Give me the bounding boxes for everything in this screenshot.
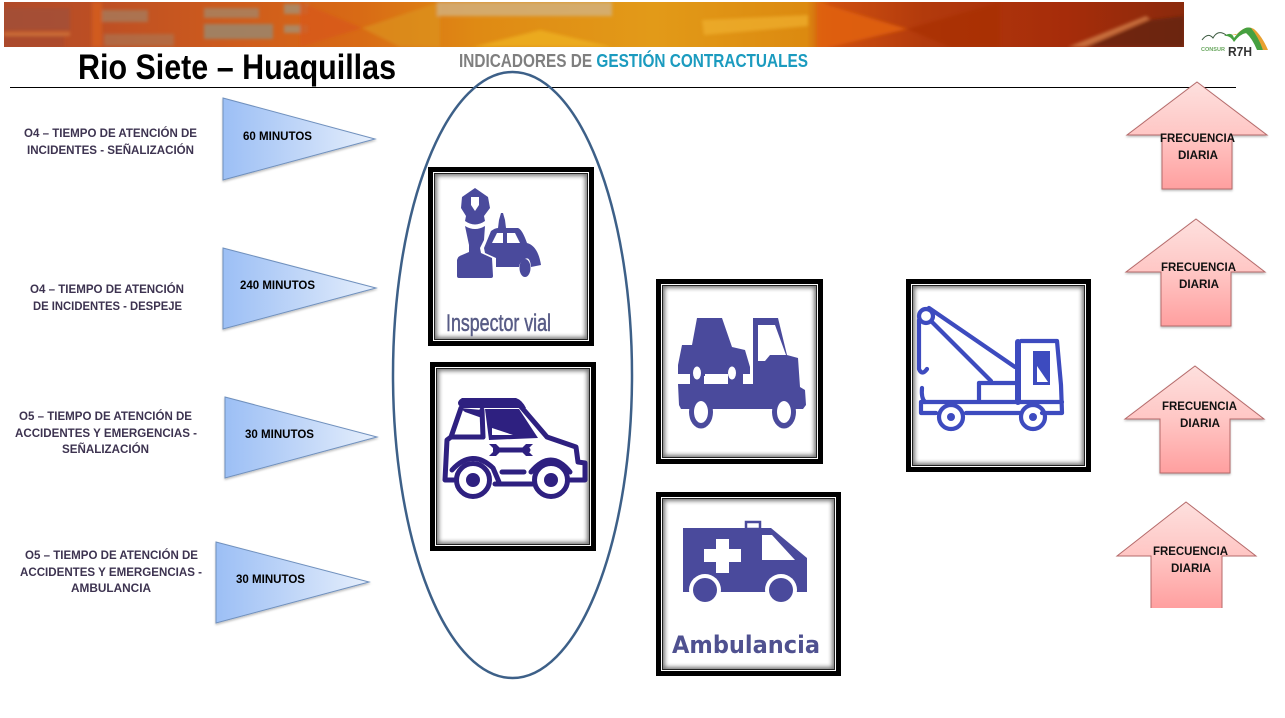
text: ambulancia: Ambulancia bbox=[672, 631, 820, 659]
label: O4 despeje: DE INCIDENTES - DESPEJE bbox=[33, 299, 182, 313]
arrow: frecuencia diaria 3 bbox=[1125, 366, 1264, 473]
label: O5 señalización: O5 – TIEMPO DE ATENCIÓN DE bbox=[19, 408, 192, 423]
arrow: frecuencia diaria 1: DIARIA bbox=[1178, 148, 1218, 162]
label: O5 señalización: SEÑALIZACIÓN bbox=[62, 441, 149, 456]
triangle: 240 minutos: 240 MINUTOS bbox=[240, 278, 315, 292]
triangle: 30 minutos bbox=[216, 542, 369, 623]
header banner bbox=[4, 2, 1268, 88]
arrow: frecuencia diaria 4: FRECUENCIA bbox=[1153, 544, 1228, 558]
indicator row 4 bbox=[20, 542, 369, 623]
icon card: taller car bbox=[430, 362, 596, 551]
label: O4 señalización: O4 – TIEMPO DE ATENCIÓN DE bbox=[24, 125, 197, 140]
triangle: 30 minutos: 30 MINUTOS bbox=[245, 427, 314, 441]
triangle: 60 minutos: 60 MINUTOS bbox=[243, 129, 312, 143]
arrow: frecuencia diaria 3: DIARIA bbox=[1180, 416, 1220, 430]
triangle: 240 minutos bbox=[223, 248, 376, 329]
triangle: 30 minutos bbox=[225, 397, 377, 478]
label: O5 ambulancia: AMBULANCIA bbox=[71, 581, 151, 595]
oval grouping patrol vehicles bbox=[393, 72, 632, 678]
arrow: frecuencia diaria 2: DIARIA bbox=[1179, 277, 1219, 291]
arrow: frecuencia diaria 1 bbox=[1127, 82, 1267, 189]
logo: Consur R7H bbox=[1201, 27, 1268, 59]
logo: Consur R7H: CONSUR bbox=[1201, 47, 1225, 53]
title: Rio Siete – Huaquillas bbox=[78, 48, 396, 87]
icon card: flatbed tow truck bbox=[656, 279, 823, 464]
label: O5 ambulancia: O5 – TIEMPO DE ATENCIÓN DE bbox=[25, 547, 198, 562]
indicator row 1 bbox=[24, 98, 375, 180]
icon card: inspector vial bbox=[428, 167, 594, 346]
text: inspector vial: Inspector vial bbox=[446, 310, 551, 337]
logo: Consur R7H: R7H bbox=[1228, 44, 1252, 59]
label: O4 señalización: INCIDENTES - SEÑALIZACIÓN bbox=[27, 142, 194, 157]
arrow: frecuencia diaria 1: FRECUENCIA bbox=[1160, 131, 1235, 145]
label: O5 ambulancia: ACCIDENTES Y EMERGENCIAS - bbox=[20, 565, 202, 579]
icon card: ambulancia bbox=[656, 492, 841, 676]
arrow: frecuencia diaria 2: FRECUENCIA bbox=[1161, 260, 1236, 274]
arrow: frecuencia diaria 2 bbox=[1126, 219, 1265, 326]
arrow: frecuencia diaria 4: DIARIA bbox=[1171, 561, 1211, 575]
arrow: frecuencia diaria 4 bbox=[1117, 502, 1256, 608]
label: O4 despeje: O4 – TIEMPO DE ATENCIÓN bbox=[30, 281, 184, 296]
indicator row 3 bbox=[15, 397, 377, 478]
icon card: crane tow truck bbox=[906, 279, 1091, 472]
subtitle: indicadores de gestión contractuales: INDICADORES DE GESTIÓN CONTRACTUALES bbox=[459, 50, 808, 71]
triangle: 60 minutos bbox=[223, 98, 375, 180]
triangle: 30 minutos: 30 MINUTOS bbox=[236, 572, 305, 586]
indicator row 2 bbox=[30, 248, 376, 329]
arrow: frecuencia diaria 3: FRECUENCIA bbox=[1162, 399, 1237, 413]
label: O5 señalización: ACCIDENTES Y EMERGENCIAS - bbox=[15, 426, 197, 440]
